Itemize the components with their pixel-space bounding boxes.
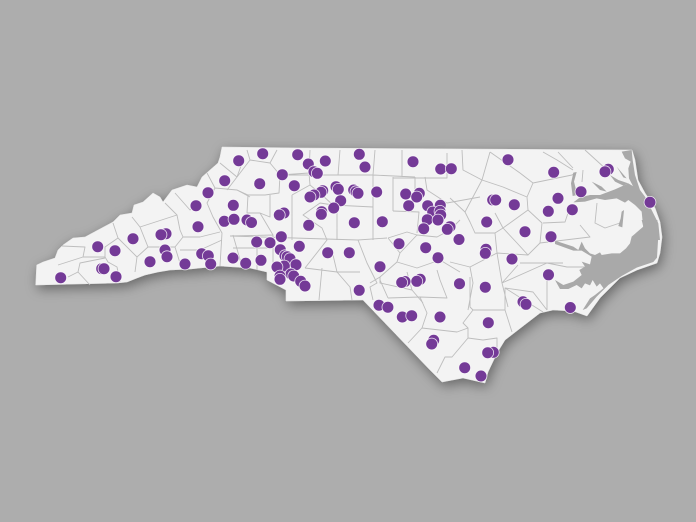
Albemarle and Croatan sounds xyxy=(573,183,660,240)
Chowan River xyxy=(571,172,577,196)
Perquimans River xyxy=(592,182,607,192)
water: Pamlico area xyxy=(555,220,659,310)
water: Albemarle area xyxy=(571,150,660,240)
Currituck Sound xyxy=(622,150,640,190)
Pamlico Sound with Pamlico and Neuse rivers xyxy=(555,220,659,289)
Core Sound xyxy=(583,285,608,310)
location markers xyxy=(55,148,656,382)
state outline xyxy=(36,147,662,383)
Alligator River xyxy=(618,210,624,227)
county boundaries xyxy=(58,150,620,373)
Pasquotank River xyxy=(610,167,628,186)
